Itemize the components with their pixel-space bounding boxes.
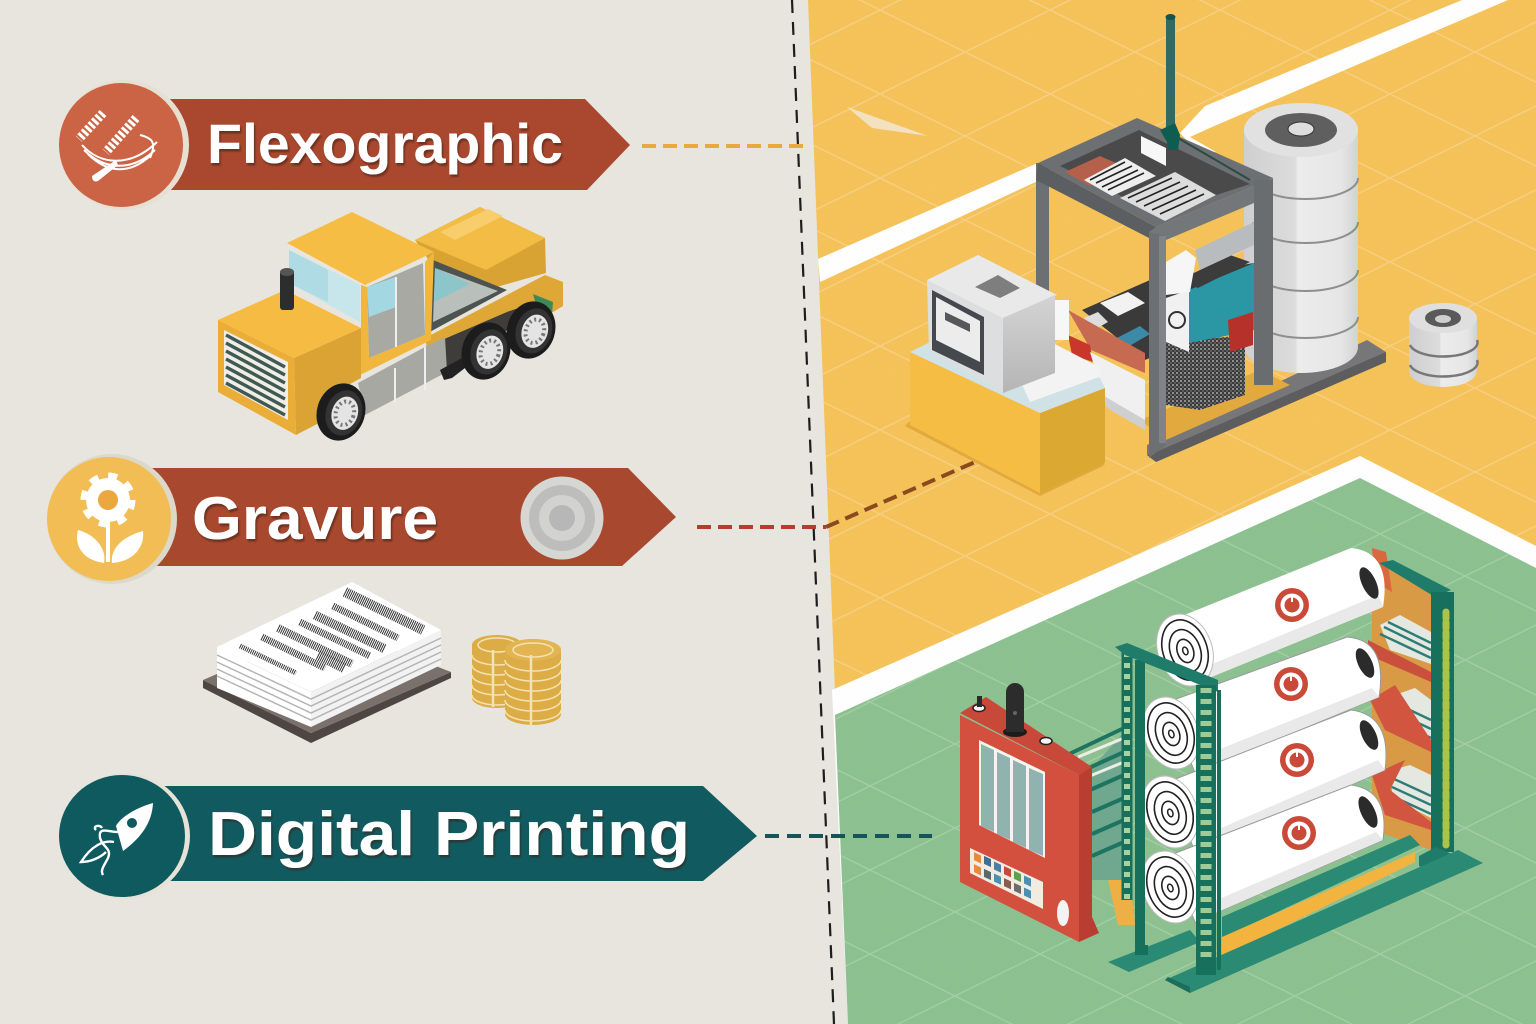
icon: yellow truck <box>218 207 563 447</box>
dashed divider line <box>792 0 834 1024</box>
banner: Gravure <box>47 454 676 584</box>
yellow kiosk base <box>905 342 1105 496</box>
heading: Gravure: Gravure <box>192 485 438 552</box>
panel: yellow isometric floor <box>808 0 1536 1024</box>
back frame leg <box>1036 163 1049 298</box>
roller 3 <box>1132 710 1386 856</box>
white road on yellow floor <box>818 162 1040 282</box>
feed slats <box>1065 728 1135 925</box>
connector: gravure <box>697 459 982 527</box>
icon: gravure cylinder disc <box>520 476 604 560</box>
truck exhaust <box>280 268 294 310</box>
truck rear cab glass <box>426 258 507 334</box>
cabinet button panel <box>970 848 1043 909</box>
connector: digital printing <box>765 834 932 838</box>
truck hood and grille <box>294 328 361 435</box>
monitor unit <box>927 255 1069 393</box>
panel: green isometric floor <box>832 456 1536 1024</box>
pole and clamp <box>1160 14 1180 150</box>
truck wheels <box>309 377 373 447</box>
icon: gear flower <box>47 457 171 581</box>
printed text rows <box>240 592 423 673</box>
front frame legs <box>1149 180 1273 458</box>
small paper roll <box>1409 303 1478 387</box>
red control cabinet <box>960 683 1099 942</box>
illustration: flexographic press <box>905 14 1478 496</box>
rear frame <box>1368 548 1456 873</box>
floor rails <box>1108 835 1483 993</box>
truck bed and deck <box>415 207 546 290</box>
icon: stack of printed paper <box>203 582 451 743</box>
illustration: digital press rollers <box>960 548 1483 993</box>
connector: flexographic <box>642 144 810 148</box>
white road upper stretch <box>1180 0 1508 152</box>
white tray <box>1020 343 1101 402</box>
base plate <box>1140 340 1386 462</box>
roller 1 <box>1147 548 1385 694</box>
interior printed material <box>1068 222 1254 430</box>
banner: Flexographic <box>59 80 630 210</box>
icon: gold coin stacks <box>472 635 561 725</box>
icon: rocket <box>59 775 185 897</box>
front frame <box>1115 643 1221 975</box>
cabinet knob <box>1003 683 1027 737</box>
icon: flexographic brush <box>59 83 183 207</box>
top frame <box>1036 118 1273 240</box>
roller 2 <box>1133 637 1381 777</box>
heading: Digital Printing: Digital Printing <box>208 800 690 869</box>
cabinet screen <box>979 740 1045 858</box>
truck cab body <box>367 263 425 358</box>
tall paper roll <box>1244 103 1358 373</box>
heading: Flexographic: Flexographic <box>207 112 563 175</box>
roller 4 <box>1132 785 1384 931</box>
banner: Digital Printing <box>59 773 757 899</box>
